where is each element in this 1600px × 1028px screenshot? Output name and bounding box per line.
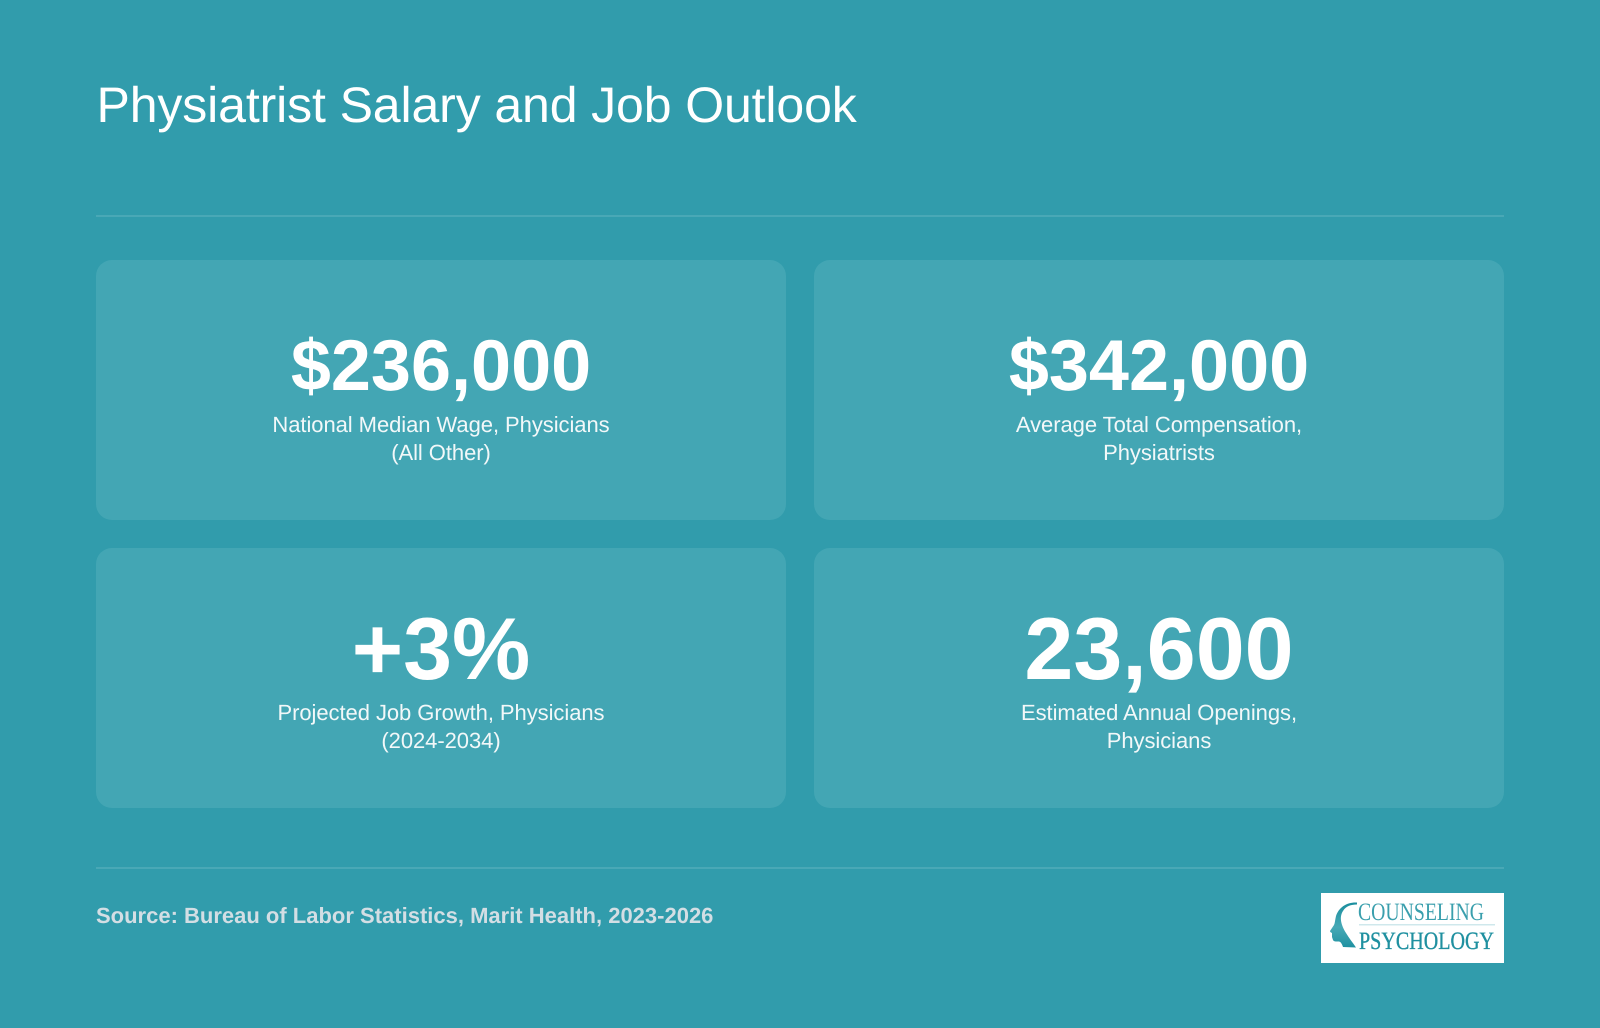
stat label: compensation: Physiatrists <box>1103 440 1215 465</box>
logo wordmark <box>1358 899 1495 955</box>
stat label: job growth: (2024-2034) <box>381 728 501 753</box>
stat label: compensation: Average Total Compensation, <box>1016 412 1302 437</box>
source text: Source: Bureau of Labor Statistics, Marit Health, 2023-2026 <box>96 903 713 928</box>
stat label: annual openings: Estimated Annual Openings, <box>1021 700 1297 725</box>
stat value: compensation: $342,000 <box>1009 326 1309 406</box>
stat label: median wage: (All Other) <box>391 440 491 465</box>
stat label: job growth <box>277 700 604 753</box>
stat value: annual openings: 23,600 <box>1024 599 1294 698</box>
logo: Counseling Psychology <box>1321 893 1504 963</box>
panel: average total compensation <box>814 260 1504 520</box>
stat label: annual openings <box>1021 700 1297 753</box>
title: Physiatrist Salary and Job Outlook <box>96 77 857 133</box>
icon: head profile <box>1330 902 1357 948</box>
stat label: job growth: Projected Job Growth, Physicians <box>277 700 604 725</box>
panel: national median wage <box>96 260 786 520</box>
stat label: compensation <box>1016 412 1302 465</box>
panel: projected job growth <box>96 548 786 808</box>
panel: estimated annual openings <box>814 548 1504 808</box>
stat value: median wage: $236,000 <box>291 326 591 406</box>
stat label: median wage <box>272 412 610 465</box>
stat label: median wage: National Median Wage, Physicians <box>272 412 610 437</box>
stat label: annual openings: Physicians <box>1107 728 1211 753</box>
stat value: job growth: +3% <box>352 599 530 698</box>
